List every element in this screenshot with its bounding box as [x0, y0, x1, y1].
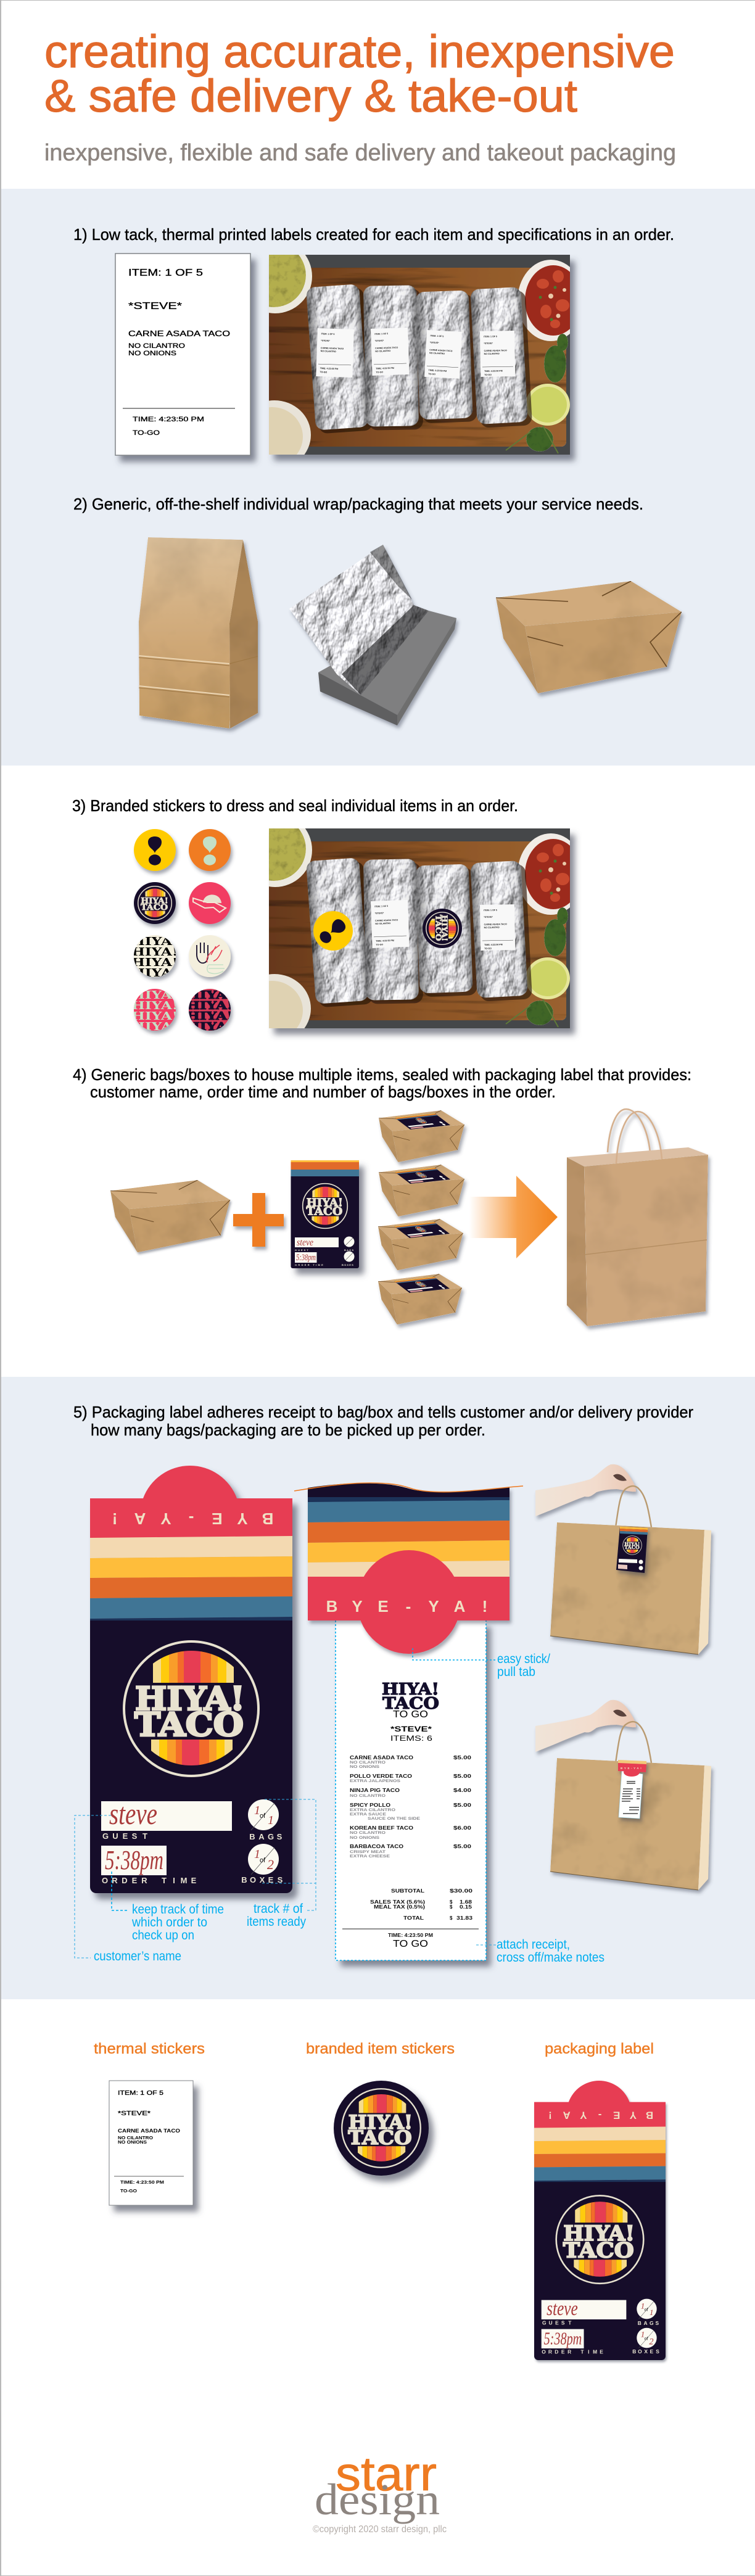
heading: step 5 [73, 1403, 693, 1439]
packaging label sample: 1 [641, 2330, 645, 2339]
packaging label sample: BAGS [638, 2320, 659, 2326]
photo: foil-wrapped items with thermal labels: ITEM: 1 OF 5 [374, 332, 388, 336]
packaging label small: BAGS [344, 1249, 354, 1252]
yellow sticker on item [305, 903, 361, 959]
foil sheet dispenser box [289, 545, 456, 725]
receipt order details: BARBACOA TACO [350, 1844, 403, 1849]
sticker: HIYA pattern mint on pink: HIYA! [131, 1020, 178, 1033]
logo sticker on item: HIYA! [440, 915, 450, 941]
sticker: HIYA pattern black on cream: HIYA! [131, 946, 178, 959]
receipt totals: $30.00 [450, 1888, 473, 1894]
labelled box 3: HIYA! [416, 1228, 424, 1230]
sticker: taco in hand [189, 882, 231, 924]
callout: item count: items ready [247, 1915, 306, 1929]
receipt totals: SUBTOTAL [391, 1888, 424, 1894]
photo: foil-wrapped items with thermal labels: TO-GO [320, 371, 327, 374]
thermal label large: NO CILANTRO [128, 342, 186, 350]
photo: foil-wrapped items with thermal labels: *STEVE* [321, 339, 331, 342]
packaging label large: of [260, 1857, 266, 1864]
receipt order details: EXTRA CHEESE [350, 1854, 390, 1859]
sticker: HIYA pattern mint on pink: HIYA! [131, 1010, 178, 1023]
packaging label small [291, 1160, 359, 1268]
branded sticker sample: HIYA! [349, 2112, 413, 2134]
photo: foil-wrapped items with branded stickers: *STEVE* [484, 916, 493, 919]
packaging label sample: steve [547, 2298, 578, 2320]
labelled box 3: TACO [418, 1229, 426, 1231]
title: creating accurate, inexpensive [44, 26, 675, 77]
packaging label large: of [260, 1812, 266, 1820]
receipt totals: 0.15 [460, 1904, 472, 1910]
packaging label small: steve [297, 1237, 313, 1248]
packaging label small: HIYA! [307, 1197, 343, 1210]
labelled box 2: TACO [418, 1174, 426, 1177]
labelled box 4: HIYA! [416, 1282, 424, 1285]
plus icon [233, 1193, 284, 1247]
receipt order details: $4.00 [453, 1788, 472, 1793]
callout: easy stick pull tab [413, 1648, 550, 1679]
packaging label sample: of [645, 2336, 648, 2341]
photo: foil-wrapped items with thermal labels: ITEM: 1 OF 5 [430, 334, 444, 337]
receipt with folded label [294, 1483, 523, 1960]
sticker: HIYA pattern black on cream: HIYA! [131, 935, 178, 948]
packaging label sample: 5:38pm [544, 2329, 582, 2349]
receipt order details [350, 1726, 472, 1859]
photo: foil-wrapped items with thermal labels: *STEVE* [484, 342, 493, 345]
packaging label large: GUEST [102, 1831, 147, 1841]
labelled box 3 [378, 1219, 463, 1270]
sticker: HIYA pattern navy on pink [186, 989, 233, 1033]
labelled box 2: HIYA! [416, 1173, 425, 1176]
photo: foil-wrapped items with thermal labels [238, 239, 584, 469]
copyright: ©copyright 2020 starr design, pllc [313, 2524, 447, 2535]
title [44, 26, 675, 122]
thermal label large: TO-GO [133, 429, 160, 437]
photo: foil-wrapped items with thermal labels: TIME: 4:23:50 PM [376, 367, 394, 370]
labelled box 4 [378, 1274, 462, 1324]
receipt order details: POLLO VERDE TACO [350, 1773, 412, 1779]
packaging label sample: BYE-YA! [548, 2109, 653, 2121]
thermal sticker sample: ITEM: 1 OF 5 [118, 2089, 163, 2097]
callout: item count: track # of [254, 1902, 303, 1916]
receipt order details: EXTRA SAUCE [350, 1812, 387, 1817]
photo: foil-wrapped items with thermal labels: TIME: 4:23:50 PM [320, 367, 338, 370]
sticker: logo: HIYA! [141, 897, 168, 906]
receipt totals: $ [450, 1915, 453, 1921]
thermal label large: NO ONIONS [128, 350, 176, 357]
receipt totals: $ [450, 1904, 453, 1910]
photo: foil-wrapped items with thermal labels: ITEM: 1 OF 5 [484, 336, 497, 338]
starr design logo: design [315, 2475, 440, 2524]
folded label top: BYE-YA! [326, 1597, 487, 1616]
packaging label small: TACO [306, 1206, 342, 1218]
packaging label sample: GUEST [542, 2319, 572, 2326]
sticker: HIYA pattern navy on pink: HIYA! [186, 989, 233, 1002]
photo: foil-wrapped items with thermal labels: CARNE ASADA TACO [484, 349, 507, 352]
photo: foil-wrapped items with branded stickers: ITEM: 1 OF 5 [484, 909, 497, 912]
thermal sticker sample: NO CILANTRO [118, 2136, 154, 2140]
packaging label large: 1 [254, 1847, 260, 1861]
packaging label large: HIYA! [135, 1680, 245, 1718]
heading: step 4 [73, 1065, 691, 1101]
takeout box large [496, 581, 682, 693]
wavy orange fold line [294, 1483, 523, 1492]
photo: foil-wrapped items with thermal labels: CARNE ASADA TACO [321, 347, 344, 350]
packaging label sample: BOXES [632, 2348, 659, 2355]
callout: easy stick pull tab: easy stick/ [497, 1652, 550, 1666]
packaging label sample [534, 2081, 666, 2360]
sticker: HIYA pattern mint on pink [131, 989, 178, 1033]
heading: step 5: how many bags/packaging are to be picked up per order. [91, 1421, 485, 1439]
receipt order details: $5.00 [453, 1802, 472, 1808]
receipt order details: CARNE ASADA TACO [350, 1755, 413, 1761]
packaging label large: 1 [268, 1814, 274, 1827]
thermal label large: *STEVE* [128, 301, 182, 312]
receipt with folded label: TO GO [393, 1709, 428, 1720]
packaging label large: 1 [254, 1804, 260, 1817]
photo: foil-wrapped items with thermal labels: CARNE ASADA TACO [429, 349, 453, 352]
logo sticker on item [423, 909, 462, 948]
branded sticker sample [334, 2081, 429, 2176]
photo: foil-wrapped items with thermal labels: TO-GO [376, 371, 383, 374]
photo: foil-wrapped items with branded stickers: *STEVE* [375, 912, 384, 915]
packaging label small: GUEST [295, 1249, 310, 1252]
thermal sticker sample [109, 2081, 193, 2205]
branded sticker sample: TACO [348, 2127, 412, 2149]
packaging label sample: 1 [650, 2308, 654, 2317]
callout: attach receipt: attach receipt, [497, 1938, 570, 1952]
thermal label large [115, 254, 250, 455]
photo: foil-wrapped items with thermal labels: *STEVE* [430, 341, 439, 344]
labelled box 1: TACO [418, 1120, 426, 1123]
photo: foil-wrapped items with branded stickers: NO CILANTRO [484, 926, 500, 929]
subtitle: inexpensive, flexible and safe delivery and takeout packaging [44, 140, 676, 166]
receipt order details: $5.00 [453, 1755, 472, 1761]
receipt paper [336, 1620, 486, 1960]
receipt totals: SALES TAX (5.6%) [370, 1899, 425, 1905]
sticker: hands [189, 935, 231, 977]
sticker: HIYA pattern mint on pink: HIYA! [131, 989, 178, 1002]
packaging label sample: 2 [649, 2337, 654, 2347]
tall kraft shopping bag [567, 1109, 708, 1326]
receipt logo: TACO [382, 1695, 439, 1713]
receipt order details: KOREAN BEEF TACO [350, 1825, 413, 1831]
thermal sticker sample: CARNE ASADA TACO [118, 2128, 180, 2134]
receipt totals: $ [450, 1899, 453, 1905]
starr design logo [315, 2446, 440, 2524]
sticker: HIYA pattern black on cream: HIYA! [131, 967, 178, 980]
callout: attach receipt: cross off/make notes [497, 1951, 604, 1965]
receipt order details: EXTRA JALAPENOS [350, 1779, 401, 1783]
takeout box [110, 1180, 230, 1252]
folded label top [308, 1483, 510, 1654]
receipt logo [382, 1680, 439, 1713]
receipt order details: NO CILANTRO [350, 1831, 386, 1835]
thermal sticker sample: NO ONIONS [118, 2140, 147, 2145]
callout: order time: check up on [132, 1928, 194, 1942]
packaging label large: 5:38pm [105, 1845, 163, 1875]
photo: foil-wrapped items with thermal labels: NO CILANTRO [484, 352, 500, 355]
photo: foil-wrapped items with branded stickers [238, 813, 584, 1043]
packaging label small: 5:38pm [296, 1253, 316, 1263]
photo: foil-wrapped items with branded stickers: CARNE ASADA TACO [375, 919, 398, 922]
receipt order details: SAUCE ON THE SIDE [368, 1817, 421, 1821]
receipt totals: TOTAL [403, 1915, 424, 1921]
photo: hand holding bag with packaging label [535, 1464, 711, 1654]
photo: hand holding bag with receipt [535, 1700, 711, 1890]
receipt order details: NO CILANTRO [350, 1761, 386, 1765]
band: section 1 and 2 background [0, 189, 755, 766]
packaging label sample: ORDERTIME [542, 2349, 603, 2355]
title: & safe delivery & take-out [44, 70, 577, 122]
photo: hand holding bag with packaging label: TACO [624, 1545, 640, 1550]
receipt order details: NO ONIONS [350, 1765, 380, 1769]
heading: packaging label: packaging label [545, 2041, 654, 2057]
receipt order details: NO ONIONS [350, 1836, 380, 1840]
receipt order details: EXTRA CILANTRO [350, 1808, 395, 1812]
photo: foil-wrapped items with thermal labels: CARNE ASADA TACO [375, 346, 398, 350]
labelled box 1 [379, 1110, 464, 1162]
sticker: HIYA pattern navy on pink: HIYA! [186, 1010, 233, 1023]
callout: order time: which order to [131, 1915, 207, 1930]
packaging label sample: of [645, 2307, 648, 2312]
arrow [469, 1176, 558, 1258]
starr design logo: starr [336, 2446, 437, 2501]
receipt order details: CRISPY MEAT [350, 1850, 386, 1854]
receipt order details: SPICY POLLO [350, 1802, 390, 1808]
receipt totals: TIME: 4:23:50 PM [388, 1933, 433, 1938]
photo: foil-wrapped items with branded stickers: TIME: 4:23:50 PM [484, 943, 503, 946]
photo: hand holding bag with packaging label: HIYA! [624, 1541, 640, 1546]
packaging label sample: HIYA! [563, 2221, 635, 2245]
receipt order details: *STEVE* [390, 1726, 432, 1733]
heading: step 3: 3) Branded stickers to dress and seal individual items in an order. [72, 796, 518, 815]
heading: branded item stickers: branded item stickers [306, 2041, 455, 2057]
photo: foil-wrapped items with thermal labels: TO-GO [428, 373, 435, 376]
packaging label small: ORDER TIME [295, 1263, 324, 1266]
heading: step 5: 5) Packaging label adheres receipt to bag/box and tells customer and/or delivery provider [73, 1403, 693, 1421]
receipt order details: NO CILANTRO [350, 1794, 386, 1798]
photo: foil-wrapped items with thermal labels: TIME: 4:23:50 PM [484, 369, 503, 373]
packaging label large: 2 [267, 1857, 274, 1872]
four boxes with packaging labels [378, 1110, 464, 1324]
receipt order details: $5.00 [453, 1773, 472, 1779]
thermal sticker sample: TO-GO [120, 2189, 138, 2194]
packaging label large: ORDERTIME [102, 1876, 197, 1885]
labelled box 1: HIYA! [416, 1119, 425, 1121]
callout: item count [247, 1799, 316, 1929]
band: section 5 background [0, 1377, 755, 1999]
receipt totals: 31.83 [456, 1915, 473, 1921]
thermal sticker sample: TIME: 4:23:50 PM [120, 2181, 164, 2185]
receipt totals: TO GO [393, 1939, 428, 1949]
photo: foil-wrapped items with branded stickers: ITEM: 1 OF 5 [374, 905, 388, 908]
sticker: HIYA pattern black on cream: HIYA! [131, 956, 178, 969]
heading: thermal stickers: thermal stickers [94, 2041, 205, 2057]
receipt totals: MEAL TAX (0.5%) [374, 1904, 425, 1910]
heading: step 2: 2) Generic, off-the-shelf individual wrap/packaging that meets your service needs. [73, 495, 643, 513]
callout: customer's name: customer’s name [94, 1949, 181, 1963]
packaging label large: BOXES [241, 1875, 283, 1885]
photo: foil-wrapped items with thermal labels: ITEM: 1 OF 5 [321, 332, 335, 336]
sticker: HIYA pattern mint on pink: HIYA! [131, 999, 178, 1012]
receipt order details: $6.00 [453, 1825, 472, 1831]
thermal label large: TIME: 4:23:50 PM [133, 416, 204, 423]
photo: foil-wrapped items with thermal labels: NO CILANTRO [375, 350, 391, 353]
packaging label large: steve [109, 1796, 157, 1831]
photo: foil-wrapped items with thermal labels: *STEVE* [375, 339, 384, 342]
packaging label sample: 1 [641, 2301, 645, 2310]
kraft paper bag [139, 537, 258, 729]
sticker: logo: TACO [141, 903, 168, 912]
thermal label large: CARNE ASADA TACO [128, 329, 230, 338]
receipt order details: ITEMS: 6 [390, 1735, 432, 1743]
thermal sticker sample: *STEVE* [118, 2110, 151, 2117]
callout: order time: keep track of time [132, 1902, 224, 1917]
labelled box 2 [379, 1165, 464, 1216]
photo: foil-wrapped items with thermal labels: TIME: 4:23:50 PM [428, 369, 447, 373]
photo: foil-wrapped items with thermal labels: NO CILANTRO [321, 350, 336, 353]
photo: foil-wrapped items with branded stickers: TO-GO [484, 947, 492, 950]
heading: step 4: 4) Generic bags/boxes to house multiple items, sealed with packaging label that provides: [73, 1065, 691, 1084]
photo: foil-wrapped items with thermal labels: NO CILANTRO [429, 352, 445, 355]
sticker: HIYA pattern black on cream [131, 935, 178, 980]
packaging label large: BAGS [249, 1832, 283, 1841]
sticker: orange exclamation [189, 829, 231, 871]
photo: hand holding bag with receipt: BYE-YA! [621, 1767, 643, 1770]
photo: foil-wrapped items with branded stickers: NO CILANTRO [375, 922, 391, 925]
receipt logo: HIYA! [382, 1680, 439, 1699]
heading: step 1: 1) Low tack, thermal printed labels created for each item and specifications in an order. [73, 225, 674, 244]
photo: foil-wrapped items with branded stickers: CARNE ASADA TACO [484, 923, 507, 926]
heading: step 4: customer name, order time and number of bags/boxes in the order. [90, 1083, 556, 1101]
callout: easy stick pull tab: pull tab [497, 1665, 535, 1679]
photo: foil-wrapped items with thermal labels: TO-GO [484, 374, 492, 376]
receipt order details: NINJA PIG TACO [350, 1788, 400, 1793]
callout: customer's name [75, 1815, 181, 1963]
receipt totals [342, 1888, 479, 1949]
receipt order details: $5.00 [453, 1844, 472, 1849]
packaging label small: BOXES [342, 1263, 354, 1266]
logo sticker on item: TACO [434, 915, 443, 941]
sticker: HIYA pattern navy on pink: HIYA! [186, 999, 233, 1012]
sticker: yellow exclamation [134, 829, 176, 871]
sticker: HIYA pattern navy on pink: HIYA! [186, 1020, 233, 1033]
callout: order time [112, 1872, 224, 1942]
packaging label large: TACO [134, 1706, 244, 1744]
packaging label large [90, 1466, 292, 1893]
sticker grid [131, 829, 233, 1033]
sticker: logo [134, 882, 176, 924]
photo: foil-wrapped items with branded stickers: TIME: 4:23:50 PM [376, 939, 394, 943]
receipt totals: 1.68 [460, 1899, 472, 1905]
labelled box 4: TACO [418, 1284, 426, 1286]
photo: foil-wrapped items with branded stickers: TO-GO [376, 943, 383, 946]
packaging label large: BYE-YA! [112, 1509, 273, 1528]
packaging label sample: TACO [563, 2237, 634, 2262]
callout: attach receipt [476, 1938, 604, 1965]
thermal label large: ITEM: 1 OF 5 [128, 268, 203, 278]
